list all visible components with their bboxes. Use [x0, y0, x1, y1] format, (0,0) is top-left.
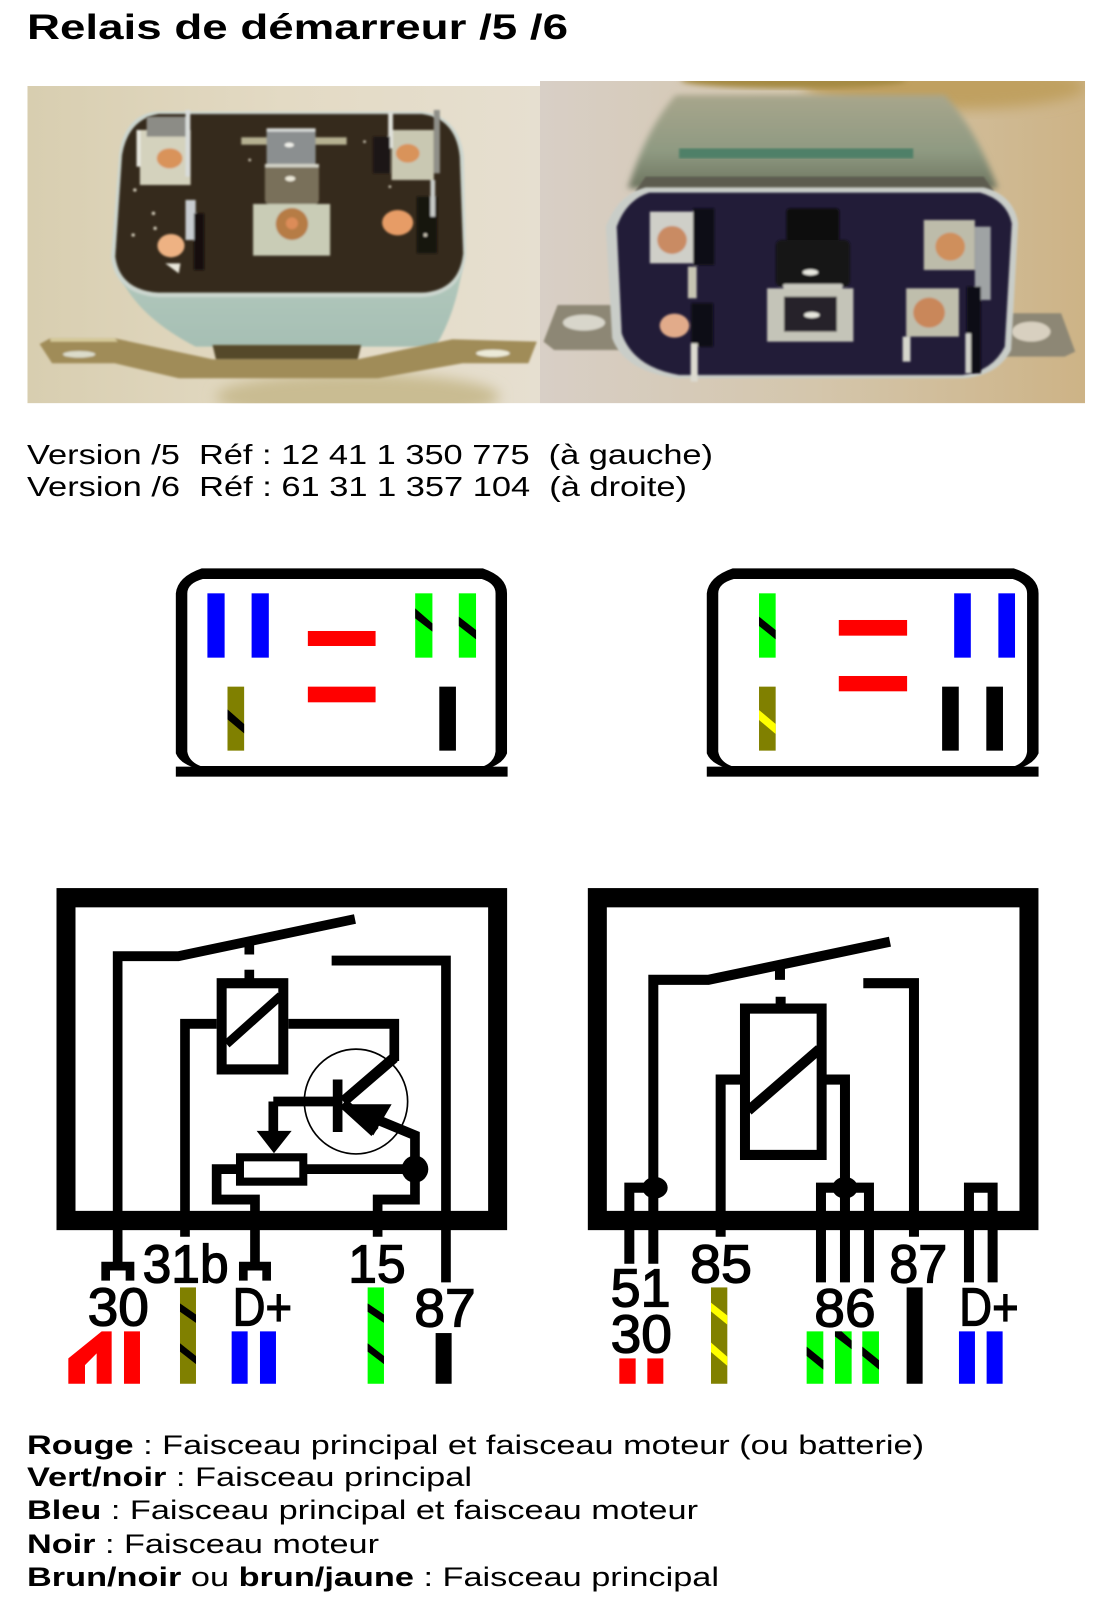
potentiometer — [240, 1157, 303, 1182]
relay housing — [597, 898, 1029, 1221]
junction node — [402, 1156, 428, 1183]
colour legend text: Vert/noir : Faisceau principal — [27, 1462, 472, 1492]
mounting tabs — [544, 305, 1075, 357]
terminal labels: 87 — [414, 1278, 476, 1338]
terminals — [131, 110, 440, 273]
terminal labels: 87 — [889, 1234, 947, 1294]
terminals — [650, 208, 991, 382]
terminal labels: D+ — [959, 1277, 1019, 1337]
terminal labels — [88, 1234, 476, 1338]
switch contacts and wires — [629, 942, 993, 1282]
title: Relais de démarreur /5 /6 — [27, 8, 568, 47]
photo: relay version /6 — [540, 63, 1086, 403]
connector layout: version /6 — [707, 568, 1039, 777]
junction nodes — [642, 1177, 858, 1199]
terminal labels — [611, 1234, 1019, 1364]
terminal labels: 15 — [348, 1234, 406, 1294]
terminal labels: 31b — [143, 1234, 229, 1294]
version references text — [27, 439, 713, 502]
colour legend text: Noir : Faisceau moteur — [27, 1529, 379, 1559]
relay face — [606, 187, 1018, 378]
coil — [222, 983, 283, 1069]
switch contacts and wires — [106, 919, 446, 1282]
relay face — [111, 112, 466, 297]
wire colour bars — [619, 1287, 1003, 1384]
transistor — [257, 1049, 408, 1154]
wiring diagram: version /6 — [597, 898, 1029, 1384]
relay body — [628, 95, 998, 188]
relay body — [116, 267, 463, 347]
terminal labels: D+ — [233, 1277, 292, 1337]
relay housing — [66, 898, 498, 1221]
terminal labels: 86 — [814, 1278, 876, 1338]
colour legend text: Brun/noir ou brun/jaune : Faisceau principal — [27, 1562, 719, 1592]
terminal labels: 30 — [611, 1304, 672, 1364]
coil — [745, 1009, 822, 1155]
version references text: Version /5 Réf : 12 41 1 350 775 (à gauche) — [27, 439, 713, 470]
colour legend text: Bleu : Faisceau principal et faisceau moteur — [27, 1495, 698, 1525]
version references text: Version /6 Réf : 61 31 1 357 104 (à droite) — [27, 471, 687, 502]
photo: relay version /5 — [27, 86, 540, 420]
terminal labels: 85 — [690, 1234, 752, 1294]
terminal labels: 51 — [611, 1258, 671, 1319]
colour legend text: Rouge : Faisceau principal et faisceau moteur (ou batterie) — [27, 1430, 924, 1460]
terminal labels: 30 — [88, 1277, 149, 1337]
connector layout: version /5 — [176, 568, 508, 777]
mounting bracket — [40, 338, 537, 378]
wiring diagram: version /5 — [66, 898, 498, 1384]
wire colour bars — [68, 1287, 452, 1384]
colour legend text — [27, 1430, 924, 1592]
